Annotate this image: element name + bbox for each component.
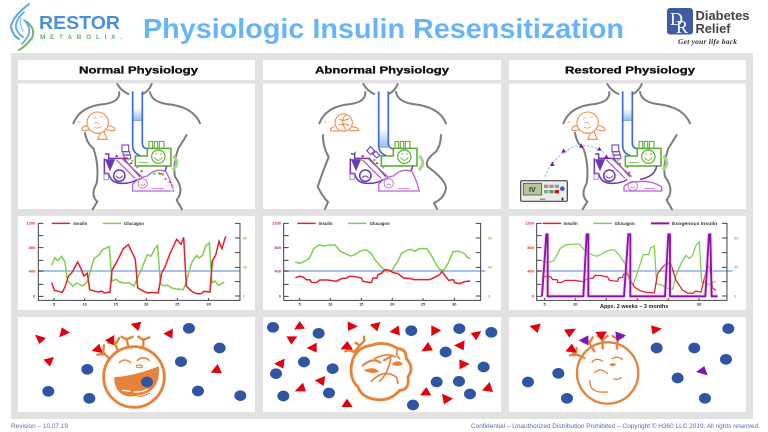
heading: Normal Physiology bbox=[79, 64, 198, 76]
title: Physiologic Insulin Resensitization bbox=[143, 13, 624, 44]
fat cell bbox=[77, 112, 115, 139]
exogenous insulin line bbox=[542, 234, 718, 296]
heading bbox=[18, 60, 255, 80]
glucagon line bbox=[542, 242, 715, 289]
axis labels: 15 bbox=[113, 302, 119, 307]
axis labels: 1200 bbox=[272, 221, 282, 226]
torso outline bbox=[73, 84, 200, 209]
insulin line bbox=[542, 263, 716, 293]
chart legend: Exogenous Insulin bbox=[672, 221, 718, 226]
pancreas bbox=[607, 158, 662, 191]
heading: Abnormal Physiology bbox=[315, 64, 449, 76]
axis labels: 0 bbox=[532, 294, 535, 299]
footer: revision: Revision – 10.07.19 bbox=[11, 423, 68, 430]
logo: Diabetes Relief bbox=[667, 8, 750, 46]
fat cell, stressed bbox=[323, 114, 359, 131]
glucagon particles bbox=[42, 323, 246, 404]
stomach and intestine bbox=[104, 154, 167, 183]
axis labels: 80 bbox=[243, 235, 248, 240]
gallbladder stack bbox=[122, 145, 131, 159]
spleen crescent bbox=[663, 156, 667, 170]
torso outline bbox=[318, 84, 446, 209]
axis labels: 800 bbox=[274, 245, 282, 250]
axis labels: 5 bbox=[299, 302, 302, 307]
insulin line bbox=[52, 236, 226, 294]
axis labels: 20 bbox=[144, 302, 149, 307]
panel: restored cell with exogenous insulin bbox=[509, 317, 746, 412]
axis labels: 800 bbox=[527, 245, 535, 250]
stomach and intestine bbox=[350, 154, 413, 183]
heading bbox=[509, 60, 746, 80]
tagline: Get your life back bbox=[678, 37, 737, 46]
axis labels bbox=[272, 221, 493, 307]
spleen crescent bbox=[419, 156, 423, 170]
laughing face bbox=[97, 337, 164, 407]
glucagon line bbox=[52, 243, 224, 290]
logo wordmark: Diabetes bbox=[696, 8, 750, 23]
body diagram bbox=[509, 84, 746, 209]
axis labels: 400 bbox=[527, 268, 535, 273]
axis labels: 1200 bbox=[26, 221, 36, 226]
content face bbox=[570, 336, 638, 404]
thoracic duct tube bbox=[379, 91, 393, 155]
axis labels: 30 bbox=[206, 302, 212, 307]
axis labels bbox=[26, 221, 248, 307]
distressed face bbox=[345, 337, 411, 400]
line chart: abnormal insulin and glucagon bbox=[263, 216, 501, 310]
insulin particles bbox=[529, 324, 662, 353]
axis labels: 10 bbox=[82, 302, 88, 307]
torso outline bbox=[563, 84, 690, 209]
gallbladder stack bbox=[612, 145, 621, 159]
pancreas bbox=[117, 158, 173, 191]
axis labels: 0 bbox=[33, 294, 36, 299]
axis labels: 1200 bbox=[525, 221, 535, 226]
arrow: exogenous insulin path bbox=[545, 143, 609, 177]
line chart: restored insulin, glucagon and exogenous insulin bbox=[509, 216, 746, 310]
axis labels: 30 bbox=[697, 302, 702, 307]
glucagon particles bbox=[267, 322, 497, 410]
gallbladder tilted stack bbox=[367, 147, 380, 158]
fat cell bbox=[567, 112, 605, 139]
axis labels: 80 bbox=[488, 235, 493, 240]
chart legend bbox=[543, 221, 718, 226]
insulin line bbox=[295, 270, 470, 284]
logo wordmark: RESTOR bbox=[39, 13, 120, 33]
chart legend: Glucagon bbox=[615, 221, 635, 226]
axis labels: 30 bbox=[452, 302, 457, 307]
icon: DR monogram: D bbox=[670, 9, 683, 29]
duration label bbox=[599, 302, 669, 310]
liver bbox=[381, 141, 417, 166]
chart legend: Glucagon bbox=[124, 221, 144, 226]
liver bbox=[625, 141, 661, 166]
chart legend bbox=[52, 221, 144, 226]
pancreas bbox=[363, 158, 419, 191]
axis labels: 40 bbox=[734, 265, 739, 270]
body diagram bbox=[263, 84, 501, 209]
axis labels: 20 bbox=[390, 302, 395, 307]
axis labels: 5 bbox=[544, 302, 547, 307]
spleen crescent bbox=[173, 156, 177, 170]
chart legend: Insulin bbox=[319, 221, 333, 226]
panel: normal cell, insulin and glucagon receptors bbox=[18, 317, 255, 412]
axis labels: 0 bbox=[243, 293, 246, 298]
icon: swirl bbox=[11, 4, 33, 50]
panel: normal physiology column bbox=[18, 60, 255, 209]
logo wordmark second line: Relief bbox=[696, 21, 731, 36]
axis labels: 10 bbox=[328, 302, 333, 307]
axis labels: 40 bbox=[488, 265, 493, 270]
stomach and intestine bbox=[594, 154, 657, 183]
panel: abnormal physiology column bbox=[263, 60, 501, 209]
chart legend: Insulin bbox=[564, 221, 578, 226]
chart legend: Insulin bbox=[73, 221, 88, 226]
axis labels: 25 bbox=[421, 302, 426, 307]
thoracic duct tube bbox=[623, 91, 637, 155]
exogenous insulin particles bbox=[579, 331, 708, 375]
axis labels: 0 bbox=[734, 293, 737, 298]
glucagon line bbox=[295, 245, 470, 272]
liver bbox=[135, 141, 171, 166]
chart legend bbox=[297, 221, 390, 226]
panel: abnormal cell, resistant with crowded particles bbox=[263, 317, 501, 412]
logo subtitle: METABOLIX. bbox=[40, 34, 122, 41]
icon: IV pump: IV bbox=[529, 187, 536, 194]
particles bbox=[617, 159, 630, 174]
icon: DR monogram bbox=[667, 8, 693, 37]
axis labels: 0 bbox=[488, 293, 491, 298]
heading bbox=[263, 60, 501, 80]
insulin and glucagon particles bbox=[115, 155, 171, 183]
duration label: Appx. 2 weeks – 3 months bbox=[600, 304, 668, 310]
line chart: normal insulin and glucagon bbox=[18, 216, 255, 310]
logo: Restor Metabolix bbox=[11, 4, 122, 50]
axis labels: 80 bbox=[734, 235, 739, 240]
insulin particles bbox=[35, 322, 222, 373]
axis labels: 400 bbox=[274, 268, 282, 273]
axis labels: 25 bbox=[175, 302, 180, 307]
axis labels: 0 bbox=[279, 294, 282, 299]
axis labels bbox=[525, 221, 739, 307]
insulin and glucagon particles bbox=[354, 151, 384, 168]
axis labels: 40 bbox=[243, 265, 248, 270]
insulin particles bbox=[274, 321, 493, 407]
glucagon particles bbox=[522, 323, 734, 404]
panel: restored physiology column bbox=[509, 60, 746, 209]
axis labels: 800 bbox=[29, 245, 36, 250]
body diagram bbox=[18, 84, 255, 209]
axis labels: 5 bbox=[53, 302, 56, 307]
axis labels: 10 bbox=[573, 302, 578, 307]
pancreas crescent bbox=[171, 183, 173, 192]
heading: Restored Physiology bbox=[565, 64, 695, 76]
axis labels: 15 bbox=[359, 302, 364, 307]
icon: DR monogram: R bbox=[676, 17, 688, 37]
thoracic duct tube bbox=[133, 91, 147, 155]
chart legend: Glucagon bbox=[370, 221, 390, 226]
axis labels: 400 bbox=[29, 268, 36, 273]
footer: confidentiality notice: Confidential – Unauthorized Distribution Prohibited – Copyright © H360 LLC 2019. All rights reserved. bbox=[471, 422, 760, 430]
